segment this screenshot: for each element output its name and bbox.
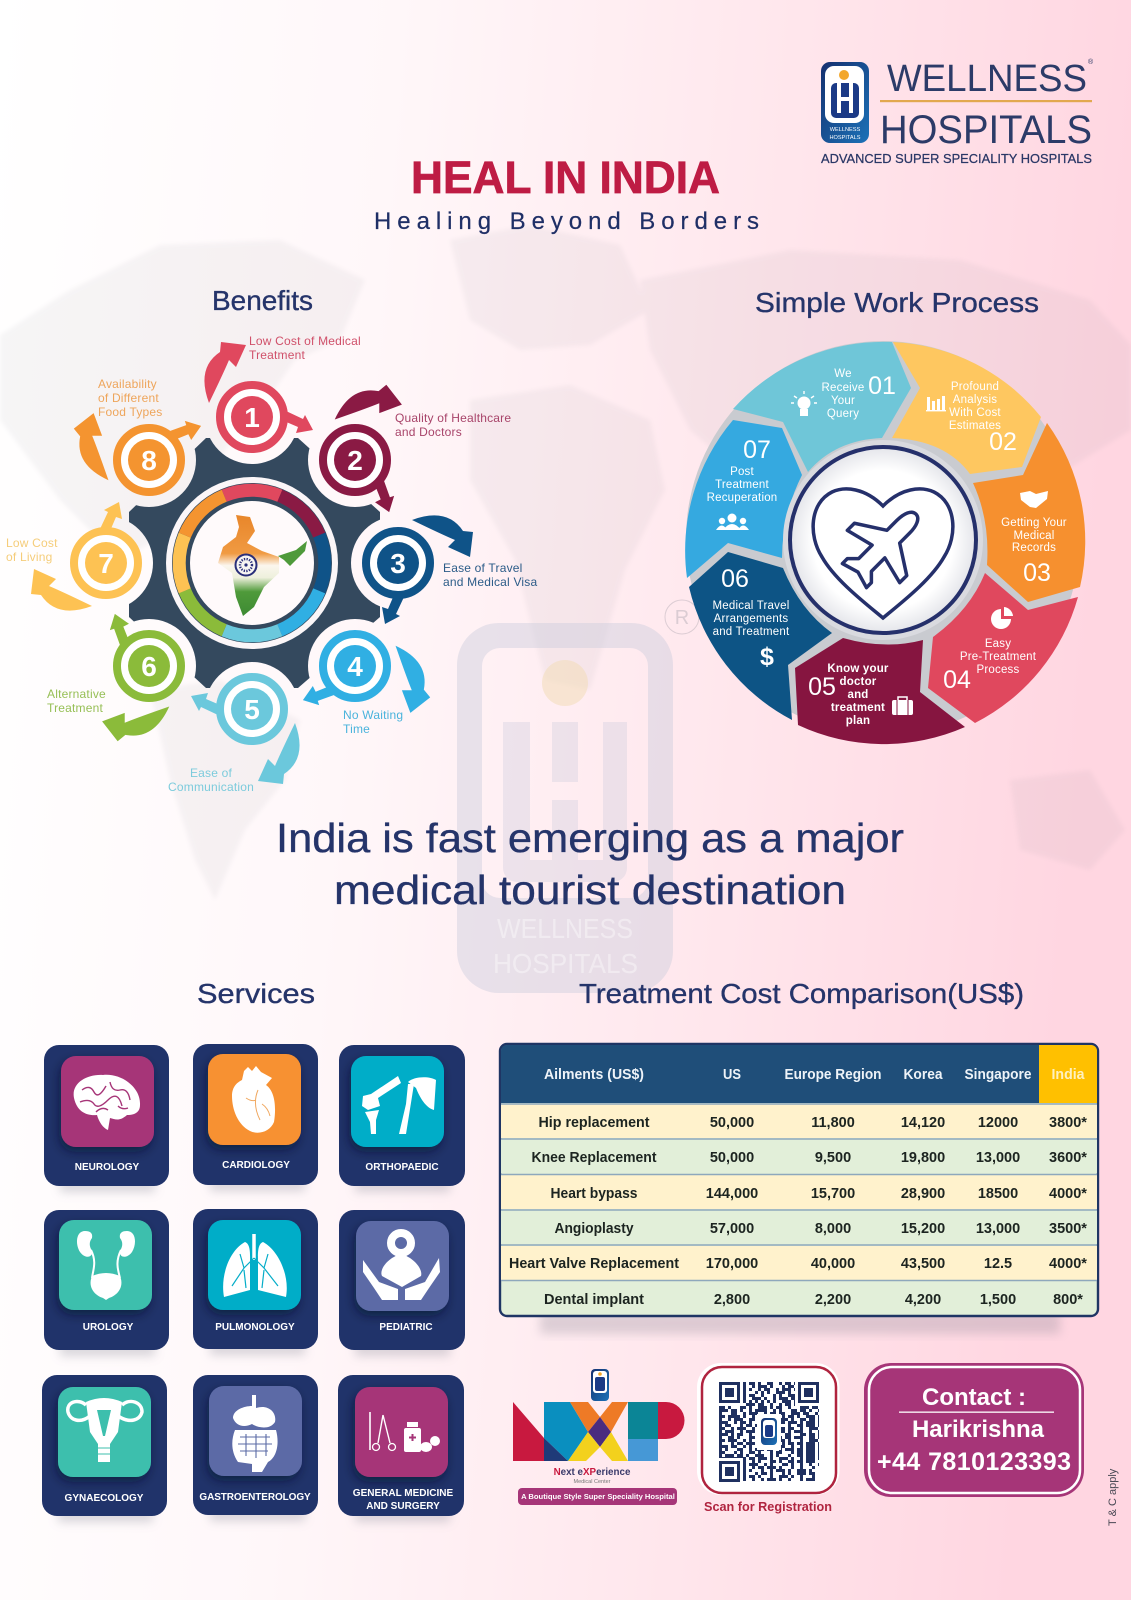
NXP tagline pill: A Boutique Style Super Speciality Hospital (521, 1492, 675, 1501)
row: angioplasty: 15,200 (901, 1221, 945, 1237)
step 7 (31, 502, 138, 611)
segment 03: 03 (1023, 559, 1051, 587)
row: heart bypass: 4000* (1049, 1186, 1087, 1202)
row: heart valve replacement: 12.5 (984, 1256, 1012, 1272)
segment 03: Getting Your (1001, 517, 1067, 529)
icon: airplane (828, 488, 942, 602)
table header: Singapore (964, 1067, 1032, 1083)
step 6 (53, 612, 194, 753)
row: hip replacement: 3800* (1049, 1115, 1087, 1131)
panel: cost comparison table (500, 1044, 1098, 1334)
card: neurology: NEUROLOGY (75, 1162, 140, 1173)
segment 05 (795, 638, 965, 744)
heading: Services: Services (197, 978, 315, 1009)
row: heart valve replacement: 40,000 (811, 1256, 855, 1272)
icon: people (716, 514, 749, 530)
step 8: 8 (141, 445, 157, 476)
logo: NXP Next eXPerience (513, 1369, 684, 1505)
icon: suitcase (892, 697, 913, 715)
row: hip replacement (501, 1104, 1097, 1138)
brand watermark (457, 600, 699, 993)
segment 04 (928, 573, 1078, 723)
row: hip replacement: 11,800 (811, 1115, 855, 1131)
card shadows (58, 1177, 450, 1522)
row: knee replacement: Knee Replacement (532, 1150, 657, 1166)
label: quality of healthcare: and Doctors (395, 425, 462, 439)
label: low cost of medical treatment: Low Cost of Medical (249, 334, 361, 348)
table header: Korea (904, 1067, 943, 1083)
icon: bones (362, 1076, 436, 1134)
card: general medicine and surgery: AND SURGERY (366, 1501, 440, 1512)
label: availability of food: of Different (98, 391, 159, 405)
icon: digestive system (232, 1395, 278, 1472)
step 2: 2 (347, 445, 363, 476)
row: hip replacement: 14,120 (901, 1115, 945, 1131)
row: dental implant: 1,500 (980, 1292, 1016, 1308)
segment 06: 06 (721, 565, 749, 593)
row: angioplasty: 57,000 (710, 1221, 754, 1237)
step 4 (301, 621, 442, 762)
icon: bar chart (926, 396, 946, 411)
segment 05: plan (846, 715, 870, 727)
segment 06: Arrangements (714, 613, 788, 625)
logo: Wellness Hospitals: ® (1088, 58, 1094, 66)
segment 05: treatment (831, 702, 885, 714)
title: HEAL IN INDIA (411, 152, 720, 203)
segment 06: and Treatment (713, 626, 790, 638)
segment 04: Easy (985, 638, 1011, 650)
row: heart valve replacement: 43,500 (901, 1256, 945, 1272)
card: cardiology: CARDIOLOGY (222, 1160, 290, 1171)
segment 05: doctor (840, 676, 877, 688)
heading: Benefits: Benefits (212, 285, 313, 316)
wordmark HOSPITALS: HOSPITALS (880, 108, 1092, 152)
headline (276, 815, 904, 913)
panel: work process pie (685, 341, 1085, 744)
contact box: +44 7810123393 (877, 1448, 1071, 1476)
brand watermark: HOSPITALS (493, 948, 638, 979)
card: urology: UROLOGY (83, 1322, 134, 1333)
segment 01: Query (827, 408, 859, 420)
segment 07: Treatment (715, 479, 769, 491)
step 7: 7 (98, 548, 114, 579)
label: no waiting time: No Waiting (343, 708, 403, 722)
icon: small hospital badge (591, 1369, 609, 1401)
NXP mark (513, 1402, 684, 1461)
step 6: 6 (141, 651, 157, 682)
logo: Wellness Hospitals (821, 58, 1094, 166)
label: ease of communication: Communication (168, 780, 254, 794)
segment 04: 04 (943, 666, 971, 694)
card: cardiology (193, 1044, 318, 1185)
step 3 (366, 515, 473, 624)
row: angioplasty: Angioplasty (554, 1221, 634, 1237)
label: no waiting time: Time (343, 722, 370, 736)
icon: QR center badge (757, 1414, 781, 1450)
gear (129, 438, 380, 688)
row: heart bypass: Heart bypass (550, 1186, 638, 1202)
row: dental implant: 2,200 (815, 1292, 851, 1308)
step 4: 4 (347, 651, 363, 682)
segment 05: and (847, 689, 869, 701)
icon: India map (218, 515, 307, 616)
card: orthopaedic: ORTHOPAEDIC (365, 1162, 439, 1173)
segment 02: Analysis (953, 394, 997, 406)
icon: handshake (1020, 491, 1048, 508)
headline: medical tourist destination (334, 867, 846, 913)
step 3: 3 (390, 548, 406, 579)
card: gastroenterology (193, 1375, 318, 1515)
label: low cost of medical treatment: Treatment (249, 348, 306, 362)
segment 01: Your (831, 395, 855, 407)
row: heart bypass: 15,700 (811, 1186, 855, 1202)
card: orthopaedic (339, 1045, 465, 1186)
row: knee replacement: 50,000 (710, 1150, 754, 1166)
row: dental implant: Dental implant (544, 1292, 644, 1308)
terms note: T & C apply (1107, 1468, 1119, 1526)
segment 05: Know your (827, 663, 889, 675)
label: low cost of living: of Living (6, 550, 52, 564)
step 8 (62, 364, 203, 505)
NXP name: Next eXPerience (554, 1467, 631, 1478)
segment 02: 02 (989, 428, 1017, 456)
row: knee replacement (501, 1139, 1097, 1173)
icon: logo badge: HOSPITALS (830, 135, 861, 141)
icon: lungs (223, 1234, 287, 1297)
label: ease of travel: Ease of Travel (443, 561, 523, 575)
brand watermark: R (675, 607, 689, 629)
NXP tagline pill (518, 1488, 677, 1505)
step 1: 1 (244, 402, 260, 433)
table header (501, 1045, 1097, 1103)
row: heart valve replacement: Heart Valve Replacement (509, 1256, 679, 1272)
table header: Ailments (US$) (544, 1067, 644, 1083)
contact box: Contact : (922, 1384, 1026, 1411)
row: angioplasty: 13,000 (976, 1221, 1020, 1237)
QR modules (719, 1382, 819, 1482)
contact box: Harikrishna (912, 1416, 1045, 1443)
segment 07: Recuperation (707, 492, 777, 504)
icon: pie chart (991, 607, 1013, 629)
segment 06: Medical Travel (713, 600, 789, 612)
segment 02: With Cost (949, 407, 1001, 419)
panel: benefits wheel (6, 334, 537, 794)
segment 02: Estimates (949, 420, 1001, 432)
caption: Scan for Registration (704, 1499, 832, 1514)
center medallion (783, 440, 983, 640)
world map watermark (0, 225, 1131, 900)
row: heart bypass (501, 1175, 1097, 1209)
table header: India (1052, 1067, 1085, 1083)
subtitle: Healing Beyond Borders (374, 208, 759, 235)
row: knee replacement: 3600* (1049, 1150, 1087, 1166)
icon: logo badge (821, 62, 869, 143)
card: general medicine and surgery: GENERAL MEDICINE (353, 1488, 454, 1499)
headline: India is fast emerging as a major (276, 815, 904, 861)
row: angioplasty: 3500* (1049, 1221, 1087, 1237)
segment 02: Profound (951, 381, 999, 393)
segment 01 (733, 342, 911, 472)
row: hip replacement: Hip replacement (538, 1115, 650, 1131)
icon: heart (813, 489, 953, 618)
tagline: ADVANCED SUPER SPECIALITY HOSPITALS (821, 151, 1092, 166)
segment 07 (685, 420, 802, 578)
segment 07: 07 (743, 436, 771, 464)
card: pulmonology: PULMONOLOGY (215, 1322, 295, 1333)
card: general medicine and surgery (338, 1375, 464, 1516)
row: angioplasty: 8,000 (815, 1221, 851, 1237)
segment 01: Receive (822, 382, 864, 394)
segment 02 (892, 342, 1041, 474)
segment 01: We (834, 368, 852, 380)
label: ease of communication: Ease of (190, 766, 233, 780)
icon: light bulb (791, 391, 817, 416)
label: ease of travel: and Medical Visa (443, 575, 537, 589)
segment 03: Records (1012, 542, 1056, 554)
icon: dollar: $ (760, 643, 774, 671)
row: dental implant (544, 1292, 1083, 1308)
card: gynaecology: GYNAECOLOGY (65, 1493, 144, 1504)
row: dental implant: 2,800 (714, 1292, 750, 1308)
card: gastroenterology: GASTROENTEROLOGY (199, 1492, 311, 1503)
card: pediatric (339, 1210, 465, 1350)
table header: US (723, 1067, 741, 1083)
icon: heart organ (232, 1066, 275, 1133)
row: dental implant: 800* (1053, 1292, 1083, 1308)
logo: NXP Next eXPerience: Medical Center (574, 1479, 611, 1485)
step 5: 5 (244, 694, 260, 725)
row: heart bypass: 144,000 (706, 1186, 758, 1202)
panel: services grid (42, 1044, 465, 1522)
row: knee replacement: 9,500 (815, 1150, 851, 1166)
row: heart valve replacement (501, 1246, 1097, 1280)
segment 05: 05 (808, 673, 836, 701)
row: knee replacement: 19,800 (901, 1150, 945, 1166)
card: urology (44, 1210, 169, 1350)
row: hip replacement: 12000 (978, 1115, 1018, 1131)
step 5 (191, 677, 300, 784)
icon: brain (74, 1075, 140, 1130)
label: quality of healthcare: Quality of Healthcare (395, 411, 511, 425)
row: angioplasty (501, 1210, 1097, 1244)
row: heart bypass: 18500 (978, 1186, 1018, 1202)
row: heart bypass: 28,900 (901, 1186, 945, 1202)
row: dental implant: 4,200 (905, 1292, 941, 1308)
row: hip replacement: 50,000 (710, 1115, 754, 1131)
card: pulmonology (193, 1209, 318, 1349)
label: low cost of living: Low Cost (6, 536, 58, 550)
card: gynaecology (42, 1375, 167, 1516)
segment 07: Post (730, 466, 755, 478)
label: alternative treatment: Treatment (47, 701, 104, 715)
segment 01: 01 (868, 372, 896, 400)
segment 04: Pre-Treatment (960, 651, 1037, 663)
segment 03 (973, 423, 1085, 602)
heading: Simple Work Process: Simple Work Process (755, 287, 1039, 318)
heading: Treatment Cost Comparison: Treatment Cost Comparison(US$) (579, 978, 1024, 1009)
brand watermark: WELLNESS (497, 913, 633, 944)
segment 03: Medical (1013, 530, 1055, 542)
table header: Europe Region (784, 1067, 882, 1083)
icon: surgical tools and medicine (370, 1412, 440, 1452)
row: heart valve replacement: 170,000 (706, 1256, 758, 1272)
segment 06 (689, 552, 832, 720)
label: availability of food: Food Types (98, 405, 162, 419)
segment 04: Process (977, 664, 1020, 676)
step 2 (310, 373, 451, 514)
colored ring (157, 468, 347, 658)
contact box (864, 1363, 1084, 1497)
icon: logo badge: WELLNESS (830, 127, 860, 133)
step 1 (204, 342, 313, 449)
card: pediatric: PEDIATRIC (379, 1322, 433, 1333)
row: knee replacement: 13,000 (976, 1150, 1020, 1166)
wordmark WELLNESS: WELLNESS (887, 58, 1087, 100)
label: alternative treatment: Alternative (47, 687, 106, 701)
icon: kidneys and bladder (77, 1231, 135, 1300)
icon: uterus (68, 1398, 142, 1462)
card: neurology (44, 1045, 169, 1186)
QR code block (697, 1363, 840, 1514)
row: heart valve replacement: 4000* (1049, 1256, 1087, 1272)
label: availability of food: Availability (98, 377, 157, 391)
icon: baby in hands (363, 1233, 440, 1300)
